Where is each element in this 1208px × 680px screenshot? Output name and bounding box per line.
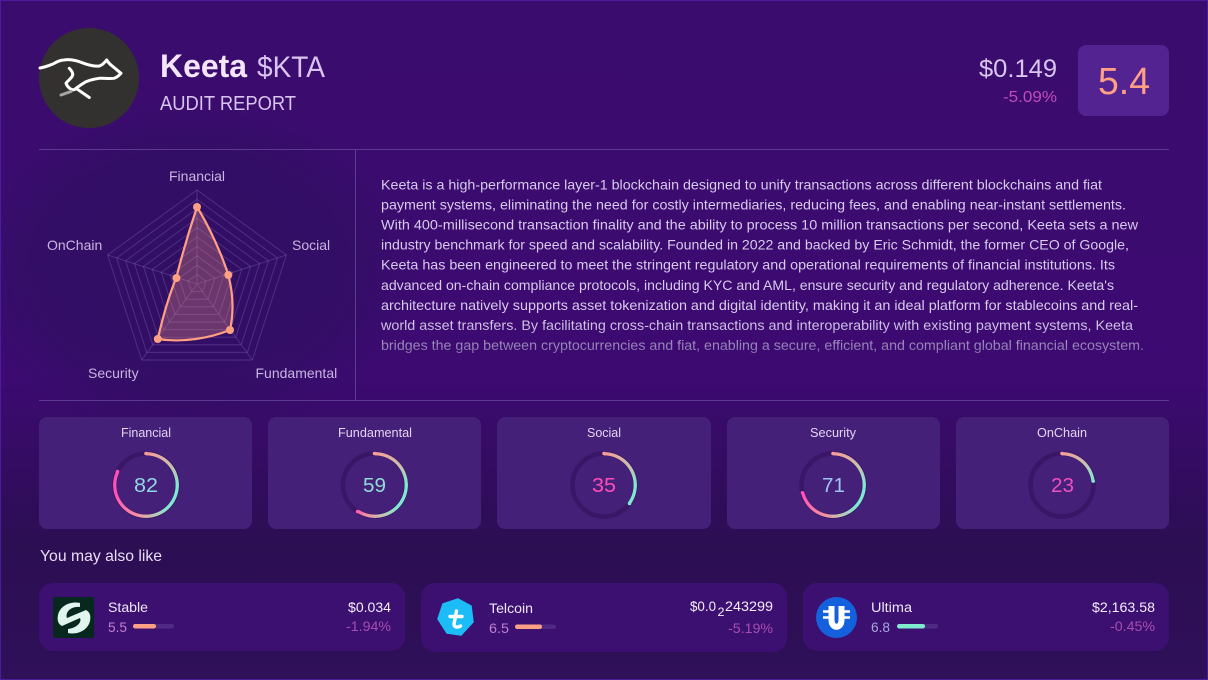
panel: Ultima card	[803, 583, 1169, 651]
panel: OnChain score: 23	[1051, 475, 1074, 497]
radar labels	[47, 168, 337, 381]
score box	[1078, 45, 1169, 116]
description text: payment systems, eliminating the need for costly intermediaries, reducing fees, and enabling near-instant settlements.	[381, 196, 1126, 212]
panel: Ultima card: $2,163.58	[1092, 599, 1155, 615]
radar labels: Fundamental	[256, 365, 337, 381]
panel: Stable card: $0.034	[348, 599, 391, 615]
price	[690, 598, 773, 619]
radar labels: Security	[88, 365, 139, 381]
panel: Ultima card: 6.8	[871, 619, 890, 635]
panel: Fundamental score: Fundamental	[338, 425, 412, 440]
panel: Stable card	[39, 583, 405, 651]
panel: Telcoin card: 6.5	[489, 620, 509, 636]
panel: OnChain score: OnChain	[1037, 425, 1087, 440]
description text: With 400-millisecond transaction finality and the ability to process 10 million transactions per second, Keeta sets a new	[381, 216, 1139, 232]
description text: advanced on-chain compliance protocols, including KYC and AML, ensure security and regulatory adherence. Keeta's	[381, 277, 1114, 293]
description text: Keeta is a high-performance layer-1 blockchain designed to unify transactions across different blockchains and fiat	[381, 176, 1102, 192]
description text: architecture natively supports asset tokenization and digital identity, making it an ideal platform for stablecoins and real-	[381, 297, 1138, 313]
score bar	[133, 624, 174, 628]
panel: Social score: 35	[592, 475, 616, 497]
panel: Telcoin card: Telcoin	[489, 601, 533, 616]
panel: Fundamental score	[268, 417, 481, 529]
radar chart	[47, 168, 337, 381]
icon: Keeta logo	[39, 28, 139, 128]
subtitle: AUDIT REPORT	[160, 93, 296, 115]
score bar	[897, 624, 938, 628]
description text: industry benchmark for speed and scalability. Founded in 2022 and backed by Eric Schmidt, the former CEO of Google,	[381, 237, 1129, 253]
radar labels: Financial	[169, 168, 225, 184]
panel: Social score	[497, 417, 711, 529]
price: $0.149	[979, 55, 1057, 83]
panel: Ultima card: -0.45%	[1110, 618, 1155, 634]
panel: Ultima card: Ultima	[871, 600, 913, 615]
panel: Stable card: Stable	[108, 600, 148, 615]
panel: Financial score: Financial	[121, 425, 171, 440]
radar labels: Social	[292, 237, 330, 253]
header	[39, 28, 1169, 128]
panel: Stable card: -1.94%	[346, 618, 391, 634]
panel: OnChain score	[956, 417, 1169, 529]
panel: Security score	[727, 417, 940, 529]
radar labels: OnChain	[47, 237, 102, 253]
title: Keeta	[160, 48, 247, 84]
panel: Financial score	[39, 417, 252, 529]
icon: Telcoin logo	[438, 599, 473, 635]
panel: Security score: Security	[810, 425, 856, 440]
panel: Telcoin card: -5.19%	[728, 620, 773, 636]
price change: -5.09%	[1003, 89, 1057, 106]
panel: Social score: Social	[587, 425, 621, 440]
panel: Security score: 71	[822, 475, 845, 497]
description text: bridges the gap between cryptocurrencies and fiat, enabling a secure, efficient, and compliant global financial ecosystem.	[381, 337, 1144, 353]
panel: Fundamental score: 59	[363, 475, 386, 497]
score box: 5.4	[1098, 61, 1150, 103]
panel: Telcoin card	[421, 583, 787, 652]
description text: Keeta has been engineered to meet the stringent regulatory and operational requirements of financial institutions. Its	[381, 257, 1115, 273]
icon: Stable logo	[53, 597, 94, 638]
radar data shape	[154, 203, 234, 343]
heading: you may also like: You may also like	[40, 548, 162, 565]
description text: world asset transfers. By facilitating cross-chain transactions and interoperability with existing payment systems, Keeta	[380, 317, 1133, 333]
price: $0.0	[690, 598, 716, 614]
description text	[380, 176, 1144, 353]
icon: Ultima logo	[816, 597, 857, 638]
ticker: $KTA	[257, 51, 325, 84]
score bar	[515, 624, 556, 629]
panel: Stable card: 5.5	[108, 619, 127, 635]
panel: Financial score: 82	[134, 475, 158, 497]
price: 243299	[725, 598, 773, 614]
price: 2	[718, 605, 725, 619]
